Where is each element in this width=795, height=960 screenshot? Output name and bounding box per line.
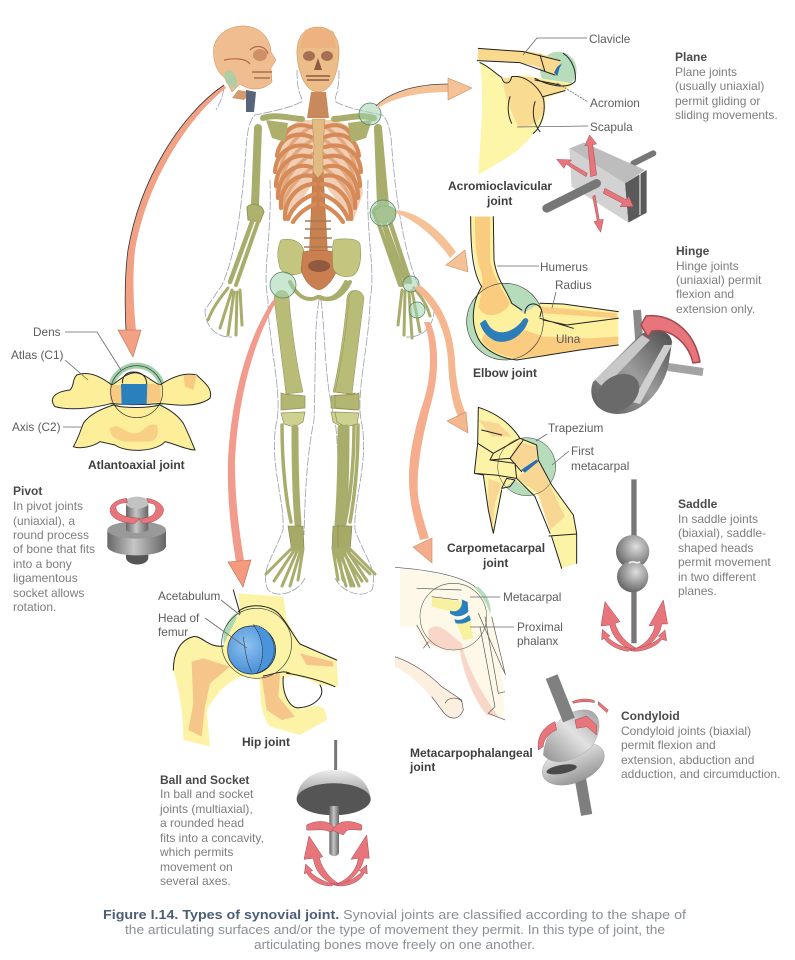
title: Metacarpophalangeal joint: Metacarpophalangeal xyxy=(410,746,533,760)
text: Condyloid description: extension, abduction and xyxy=(621,753,754,767)
icon: hinge joint xyxy=(589,310,703,420)
text: Pivot description: In pivot joints xyxy=(13,499,83,513)
text: Pivot description: into a bony xyxy=(13,557,72,571)
elbow bones xyxy=(467,217,618,360)
text: Saddle description: (biaxial), saddle- xyxy=(678,526,766,540)
text: Hinge description: (uniaxial) permit xyxy=(676,273,762,287)
text: Ball and Socket description: In ball and socket xyxy=(160,787,254,801)
text: Condyloid description: Condyloid joints (biaxial) xyxy=(621,724,751,738)
label: Atlas (C1): Atlas (C1) xyxy=(11,348,64,362)
text: Saddle description: planes. xyxy=(678,584,717,598)
text: Pivot description: rotation. xyxy=(13,600,56,614)
right hand xyxy=(398,288,430,338)
text: Ball and Socket description: joints (multiaxial), xyxy=(159,802,253,816)
label: Proximal phalanx: phalanx xyxy=(517,634,558,648)
label: Dens: Dens xyxy=(33,325,61,339)
neck xyxy=(307,92,329,118)
arrow: hand to metacarpophalangeal joint xyxy=(409,322,437,563)
text: Ball and Socket description: movement on xyxy=(160,860,233,874)
text: Pivot description: socket allows xyxy=(13,586,84,600)
text: Pivot description: round process xyxy=(13,528,89,542)
panel: hip joint xyxy=(158,589,338,749)
figure: full skeleton xyxy=(205,26,434,594)
label: Dens xyxy=(33,325,121,370)
rib cage xyxy=(230,116,406,586)
text: Plane description: permit gliding or xyxy=(675,94,760,108)
label: Scapula: Scapula xyxy=(590,120,633,134)
text: Pivot description: Pivot xyxy=(13,484,42,498)
label: Head of femur xyxy=(158,611,247,648)
text: Pivot description: (uniaxial), a xyxy=(13,514,75,528)
text: Condyloid description: adduction, and circumduction. xyxy=(621,767,780,781)
icon: saddle joint xyxy=(601,479,668,651)
skull front xyxy=(297,27,339,92)
label: First metacarpal xyxy=(552,444,629,473)
sacrum xyxy=(301,250,337,290)
title: Elbow joint: Elbow joint xyxy=(473,366,537,380)
panel: metacarpophalangeal joint xyxy=(395,567,563,774)
wrist and thumb bones xyxy=(474,407,577,568)
text: Plane description: sliding movements. xyxy=(675,108,778,122)
text: Ball and Socket description: a rounded head xyxy=(160,816,244,830)
label: Radius xyxy=(552,278,592,308)
rib cage backing xyxy=(275,120,363,222)
lumbar ticks xyxy=(304,221,332,256)
scapula and clavicle bones xyxy=(477,48,577,175)
text: Hinge description: Hinge xyxy=(676,244,710,258)
label: Humerus xyxy=(497,260,588,274)
skull side xyxy=(213,26,276,112)
arrow: hip to hip joint xyxy=(228,300,276,587)
text: Pivot description: ligamentous xyxy=(13,571,78,585)
label: Clavicle: Clavicle xyxy=(589,32,631,46)
title: Acromioclavicular joint: joint xyxy=(486,194,512,208)
spine xyxy=(309,170,328,262)
hand xyxy=(395,567,506,720)
text: Ball and Socket description: fits into a concavity, xyxy=(160,831,264,845)
right arm xyxy=(335,116,410,285)
caption: Figure I.14. Types of synovial joint. Synovial joints are classified according to the shape of xyxy=(103,907,655,922)
hip bones xyxy=(173,590,338,747)
label: Head of femur: femur xyxy=(158,625,188,639)
text: Hinge description: extension only. xyxy=(676,302,755,316)
panel: elbow joint xyxy=(467,217,618,380)
icon: ball and socket joint xyxy=(297,740,371,886)
label: Head of femur: Head of xyxy=(158,611,200,625)
label: Acromion xyxy=(557,83,640,110)
right leg xyxy=(320,239,375,586)
label: Radius: Radius xyxy=(555,278,592,292)
text: Saddle description: Saddle xyxy=(678,497,718,511)
label: First metacarpal: First xyxy=(571,444,595,458)
label: Proximal phalanx: Proximal xyxy=(517,620,563,634)
caption: articulating bones move freely on one another. xyxy=(254,937,535,952)
text: Pivot description: of bone that fits xyxy=(13,542,95,556)
label: Trapezium xyxy=(536,421,603,441)
text: Saddle description: in two different xyxy=(678,570,756,584)
body outline xyxy=(205,70,434,594)
label: Proximal phalanx xyxy=(470,620,563,648)
text: Saddle description: permit movement xyxy=(678,555,771,569)
left hand xyxy=(208,288,242,335)
icon: plane joint xyxy=(547,135,653,232)
joint highlight circles xyxy=(270,103,425,318)
text: Saddle description: shaped heads xyxy=(678,541,753,555)
panel: atlantoaxial joint xyxy=(11,325,211,472)
icon: pivot joint xyxy=(107,497,166,565)
text: Ball and Socket description: Ball and Socket xyxy=(160,773,249,787)
label: Acromion: Acromion xyxy=(590,96,640,110)
label: Atlas (C1) xyxy=(11,348,88,380)
text: Saddle description: In saddle joints xyxy=(678,512,758,526)
text: Plane description: Plane xyxy=(675,50,707,64)
arrow: wrist to carpometacarpal joint xyxy=(414,285,468,433)
icon: condyloid joint xyxy=(536,677,611,815)
text: Plane description: (usually uniaxial) xyxy=(675,79,764,93)
label: Trapezium: Trapezium xyxy=(548,421,603,435)
panel: acromioclavicular joint xyxy=(448,32,640,208)
label: Acetabulum: Acetabulum xyxy=(158,589,220,603)
label: Clavicle xyxy=(523,32,631,55)
label: Axis (C2): Axis (C2) xyxy=(12,420,61,434)
text: Plane description: Plane joints xyxy=(675,65,737,79)
title: Carpometacarpal joint: Carpometacarpal xyxy=(447,541,545,555)
title: Metacarpophalangeal joint: joint xyxy=(409,760,435,774)
label: Humerus: Humerus xyxy=(540,260,588,274)
arrow: skull to atlantoaxial joint xyxy=(118,85,226,357)
arrow: elbow to elbow joint xyxy=(396,210,468,272)
label: Metacarpal: Metacarpal xyxy=(503,590,561,604)
title: Hip joint: Hip joint xyxy=(242,735,290,749)
caption: the articulating surfaces and/or the type of movement they permit. In this type of joint, the xyxy=(125,922,665,937)
text: Ball and Socket description: which permits xyxy=(159,845,233,859)
label: Scapula xyxy=(517,120,633,134)
title: Atlantoaxial joint: Atlantoaxial joint xyxy=(88,458,185,472)
vertebrae xyxy=(52,366,211,450)
label: Acetabulum xyxy=(158,589,240,615)
arrow: shoulder to acromioclavicular joint xyxy=(376,78,472,108)
text: Ball and Socket description: several axes. xyxy=(160,874,231,888)
title: Acromioclavicular joint: Acromioclavicular xyxy=(448,179,552,193)
label: First metacarpal: metacarpal xyxy=(571,459,629,473)
text: Condyloid description: permit flexion and xyxy=(621,738,716,752)
text: Condyloid description: Condyloid xyxy=(621,709,680,723)
label: Metacarpal xyxy=(470,590,561,604)
panel: carpometacarpal joint xyxy=(447,407,629,570)
text: Hinge description: Hinge joints xyxy=(676,259,739,273)
sternum xyxy=(312,119,325,178)
text: Hinge description: flexion and xyxy=(676,287,734,301)
label: Ulna: Ulna xyxy=(556,332,581,346)
title: Carpometacarpal joint: joint xyxy=(482,556,508,570)
